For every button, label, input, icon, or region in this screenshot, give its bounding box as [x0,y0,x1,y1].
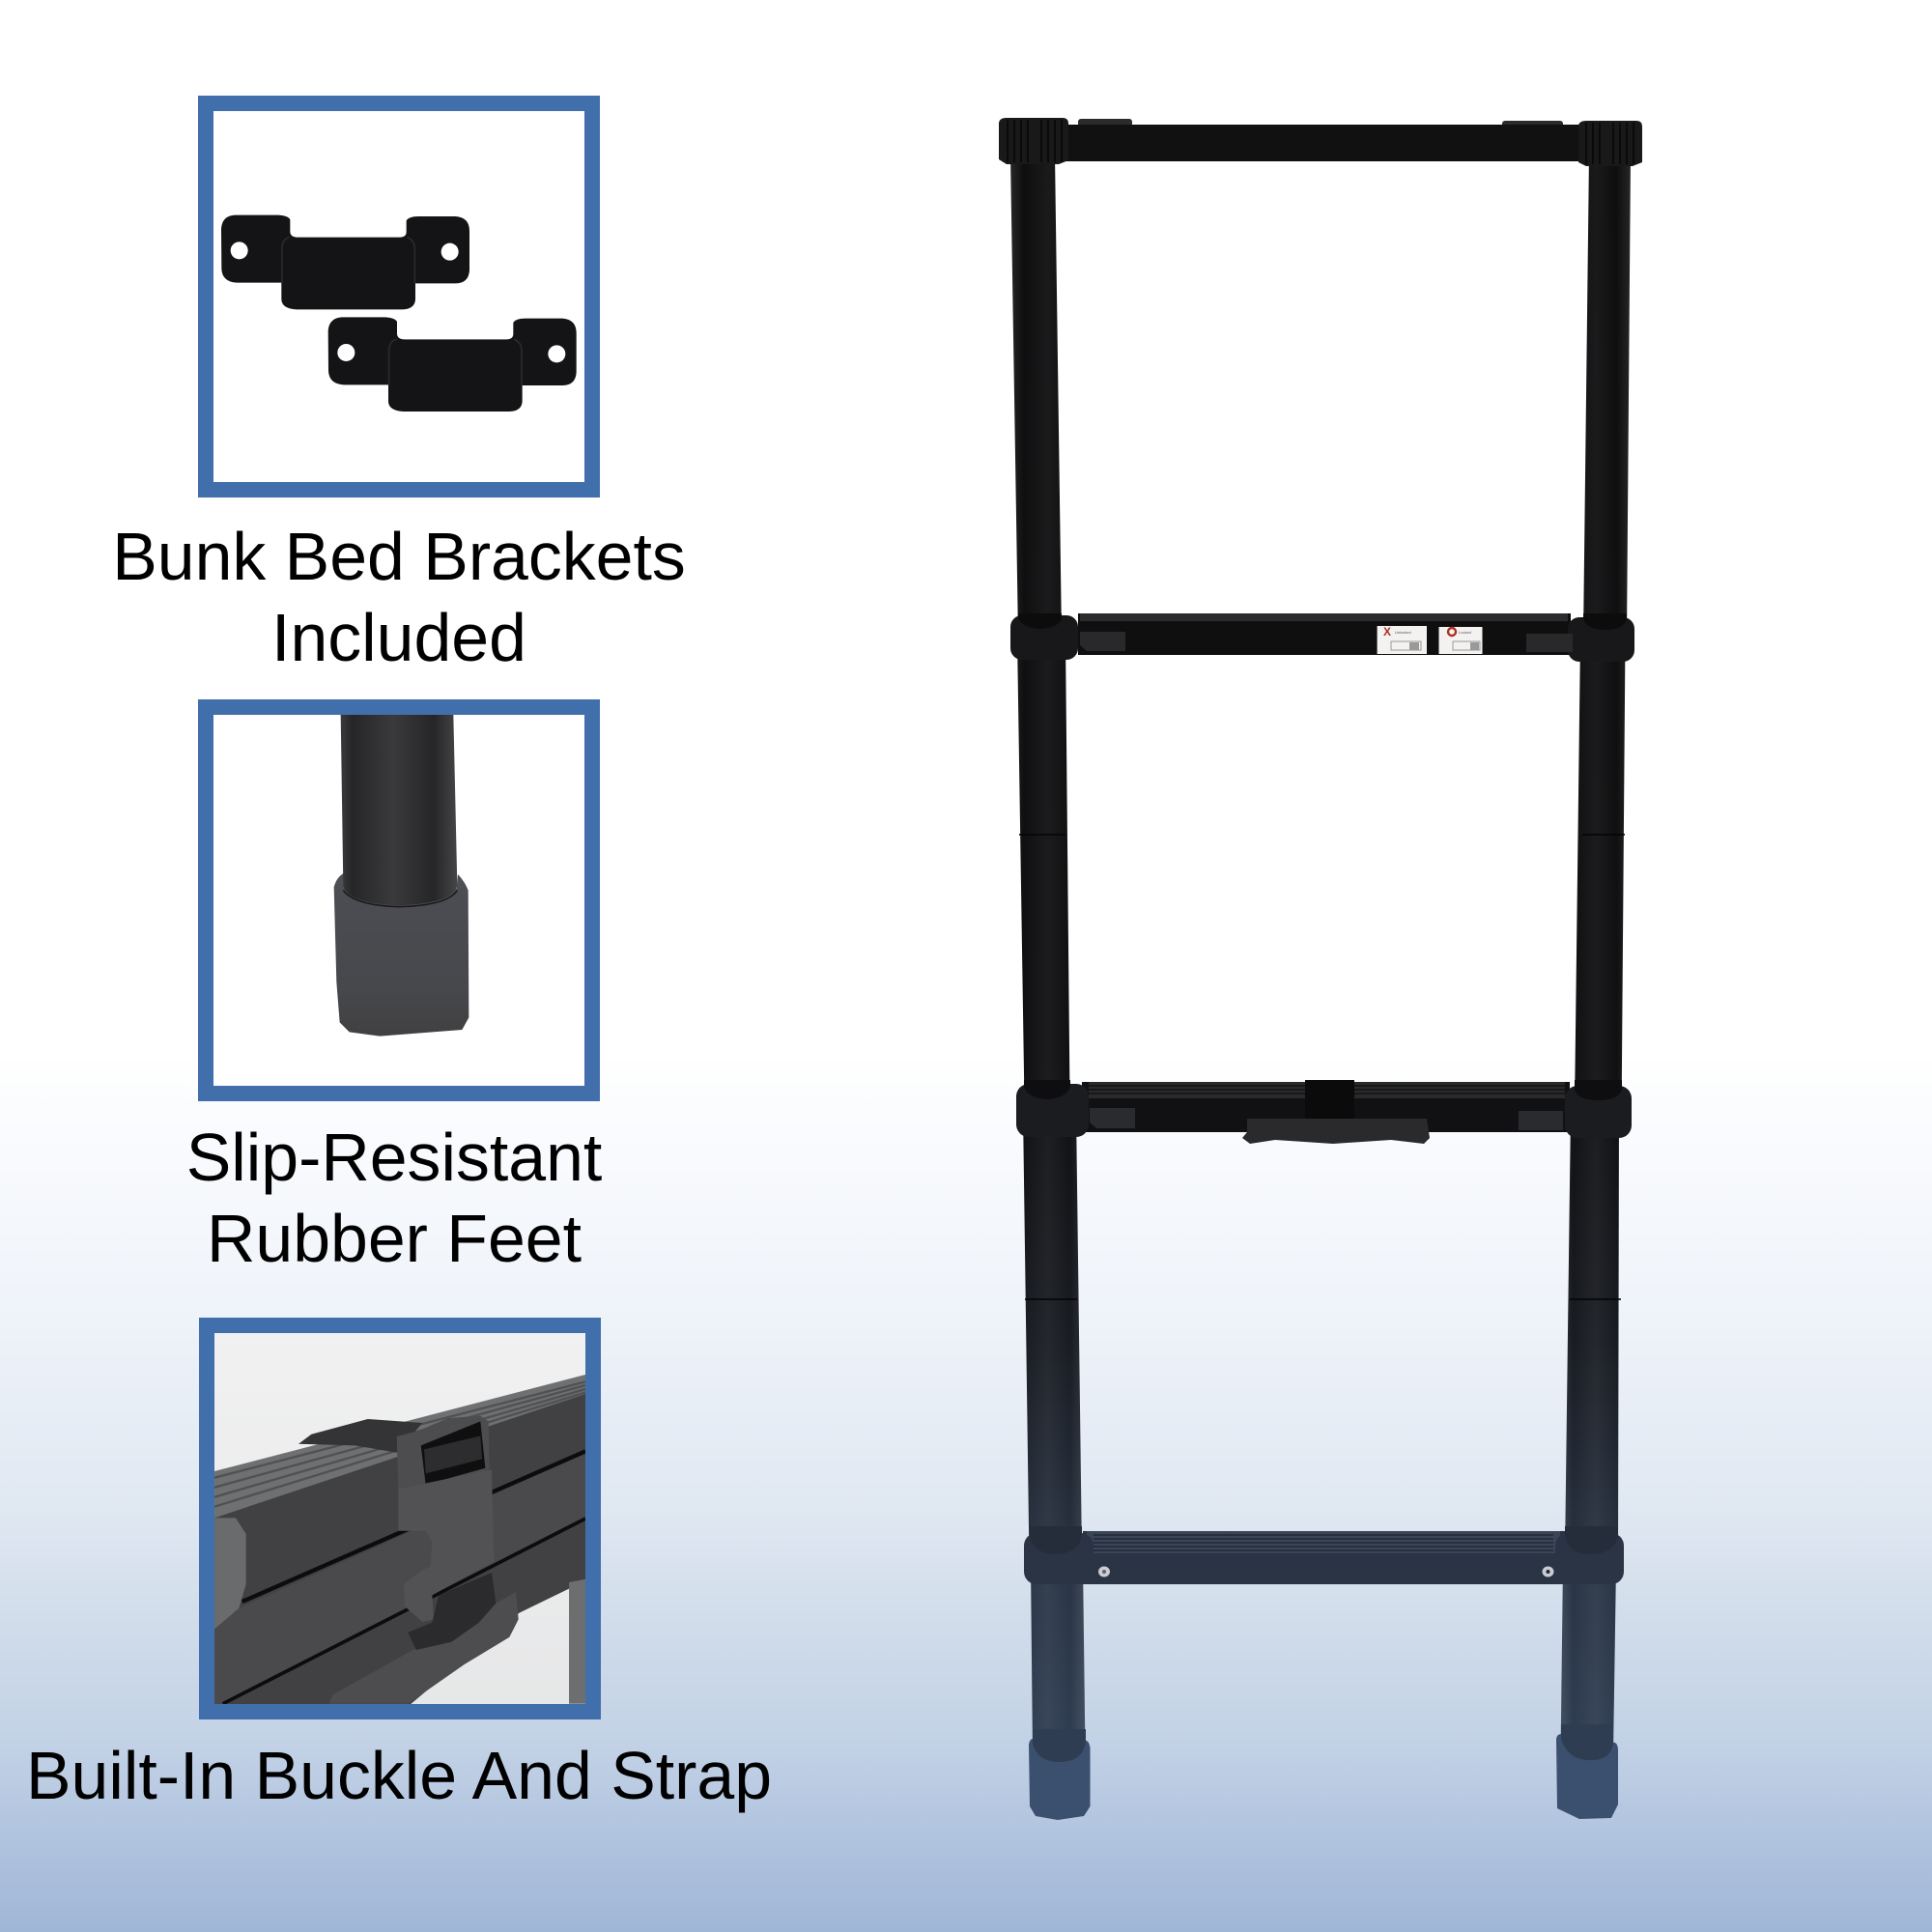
right rail [1561,155,1631,1757]
bottom rung with screws [1024,1526,1624,1584]
panel: rubber feet [198,699,600,1101]
right foot [1556,1724,1618,1819]
left rail [1010,155,1086,1761]
second rung [1010,613,1634,662]
rail section breaks [1019,835,1625,1299]
icon: tube with rubber foot [334,715,469,1037]
caption: rubber feet: Slip-Resistant [186,1120,602,1195]
caption: bunk bed brackets: Included [271,600,526,675]
third rung with strap and handle [1016,1080,1632,1144]
panel: bunk bed brackets [198,96,600,497]
caption: rubber feet [186,1120,602,1276]
screws [1098,1567,1553,1577]
icon: buckle and strap closeup [214,1375,585,1704]
sticker: locked: Locked [1459,630,1471,635]
icon: two black brackets [221,214,577,412]
sticker: unlocked: Unlocked [1395,630,1411,635]
caption: bunk bed brackets: Bunk Bed Brackets [112,519,686,594]
sticker: locked [1439,627,1482,654]
left foot [1029,1729,1090,1820]
caption: rubber feet: Rubber Feet [207,1201,582,1276]
caption: buckle and strap: Built-In Buckle And Strap [26,1738,772,1813]
sticker: unlocked: X [1383,625,1391,639]
panel: buckle and strap [199,1318,601,1719]
caption: bunk bed brackets [112,519,686,675]
sticker: unlocked [1378,625,1427,654]
top rung [999,118,1642,166]
